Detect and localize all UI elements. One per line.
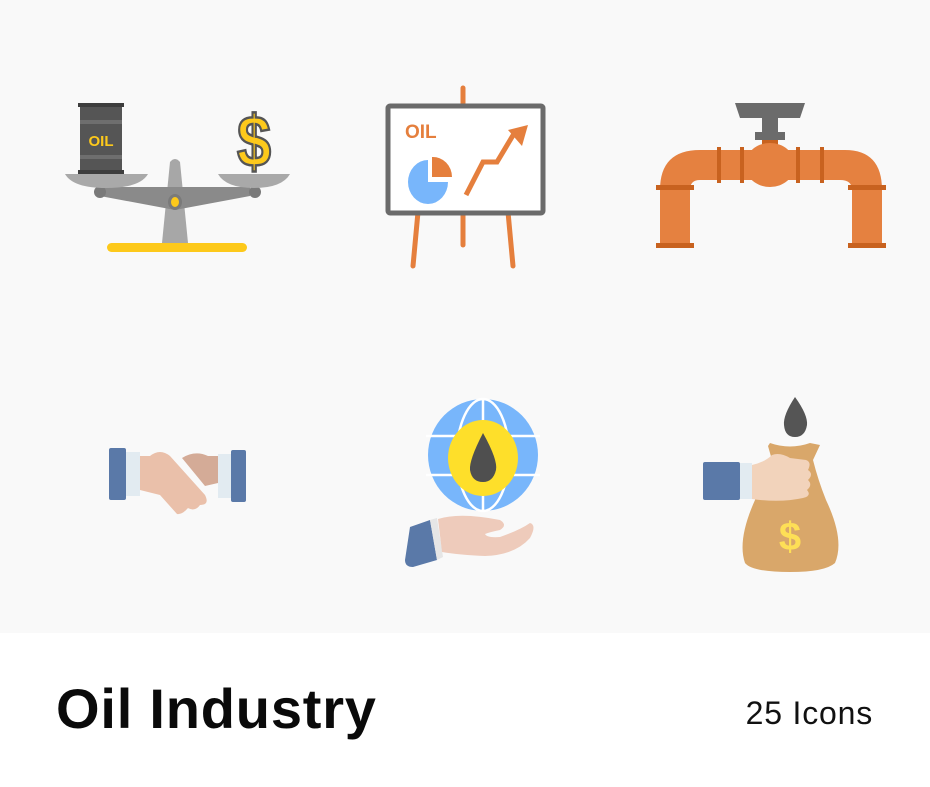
icon: globe oil hand (405, 398, 540, 567)
icon: money bag oil (703, 397, 838, 572)
icon count: 25 Icons (746, 695, 873, 731)
icon: oil scale: $ (237, 102, 271, 182)
icon: handshake (109, 448, 246, 514)
icon: oil scale (65, 102, 290, 252)
icon: money bag oil: $ (779, 515, 801, 559)
icon: oil chart easel: OIL (405, 122, 437, 143)
icon: pipeline valve (656, 103, 886, 248)
icon: oil scale: OIL (88, 133, 114, 150)
icon: oil chart easel (388, 88, 543, 266)
title: Oil Industry (56, 677, 377, 740)
